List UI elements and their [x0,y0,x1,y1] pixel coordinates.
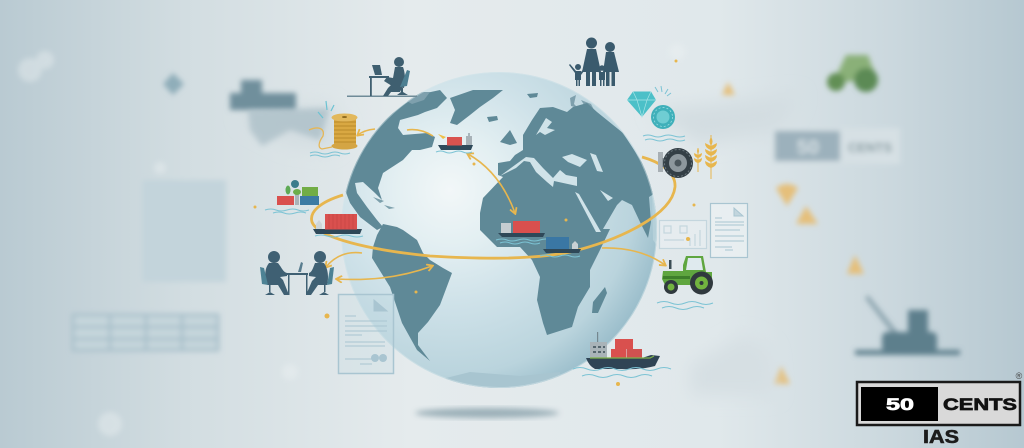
icon: container stack with plant [265,180,319,214]
inland seas [500,118,613,232]
svalbard [527,93,538,98]
madagascar [592,287,607,313]
blurred dotted route [708,72,825,76]
logo text ias: IAS [923,427,959,447]
logo black box [861,387,938,421]
rim [342,72,656,388]
small orange dots [254,60,696,386]
thread tail [309,128,332,149]
blurred landmass bottom right [690,335,775,395]
logo text cents: CENTS [943,395,1017,414]
chart panel faded [660,220,706,248]
caspian [590,153,603,172]
sparkle [318,101,334,118]
globe [341,72,660,395]
icon: two people meeting [260,251,334,295]
east asia strip [652,197,657,244]
blurred map haze [240,95,800,150]
north america [345,90,447,230]
icon: north atlantic ship [436,133,473,153]
icon: africa blue ship [540,237,581,257]
flanges [332,114,358,122]
eurasia and africa [480,103,660,335]
registered mark: ® [1016,371,1023,381]
trade arrows [326,129,665,279]
icon: family [569,38,619,86]
antarctic rim [446,372,559,388]
arctic islands [405,92,430,104]
icon: wheat [694,135,717,179]
faint circles [18,44,685,436]
orbit route line [312,157,675,258]
arrow to tractor [602,248,665,265]
mediterranean [500,157,577,187]
blurred logo [773,128,900,164]
icon: green tractor [657,256,713,310]
greenland [450,90,503,125]
iceland [487,116,498,122]
blurred logo: 50 [797,137,819,159]
icon: west ship [313,214,363,237]
continents [345,90,660,395]
blurred machinery [855,295,960,355]
persian gulf [600,190,613,201]
baltic [536,118,555,135]
blurred diamond [163,73,184,95]
blurred green tractor [827,55,878,92]
arrow to spool [358,129,375,135]
icon: thread spool [309,101,358,157]
caribbean islands [373,197,395,209]
blurred orange markers [722,82,864,384]
blurred factory silhouette [230,80,296,110]
logo: 50 CENTS IAS [857,371,1023,447]
globe drop shadow [415,408,559,418]
blurred grey land [248,108,330,146]
blurred table [73,315,218,350]
south america [372,224,452,361]
ocean sphere [341,72,657,388]
logo frame [857,382,1020,425]
arrow across north atlantic [407,130,433,136]
arrow to meeting upper [326,253,362,267]
spool body [334,118,356,146]
arrow south america to meeting [337,266,432,279]
blurred document panel [142,180,226,282]
red sea [575,192,601,232]
document faded right [710,204,748,258]
logo text 50: 50 [886,395,914,414]
document faded left [338,294,394,374]
arrow ship to africa [468,154,515,213]
united kingdom [500,130,517,145]
icon: gems [627,86,685,141]
waves [310,152,350,157]
icon: africa red ship [496,221,551,244]
icon: large cargo ship [573,332,671,378]
icon: tire [658,148,693,178]
novaya zemlya [570,95,594,109]
black sea [562,154,587,167]
icon: worker at desk [347,57,417,97]
blurred logo: CENTS [848,140,892,155]
